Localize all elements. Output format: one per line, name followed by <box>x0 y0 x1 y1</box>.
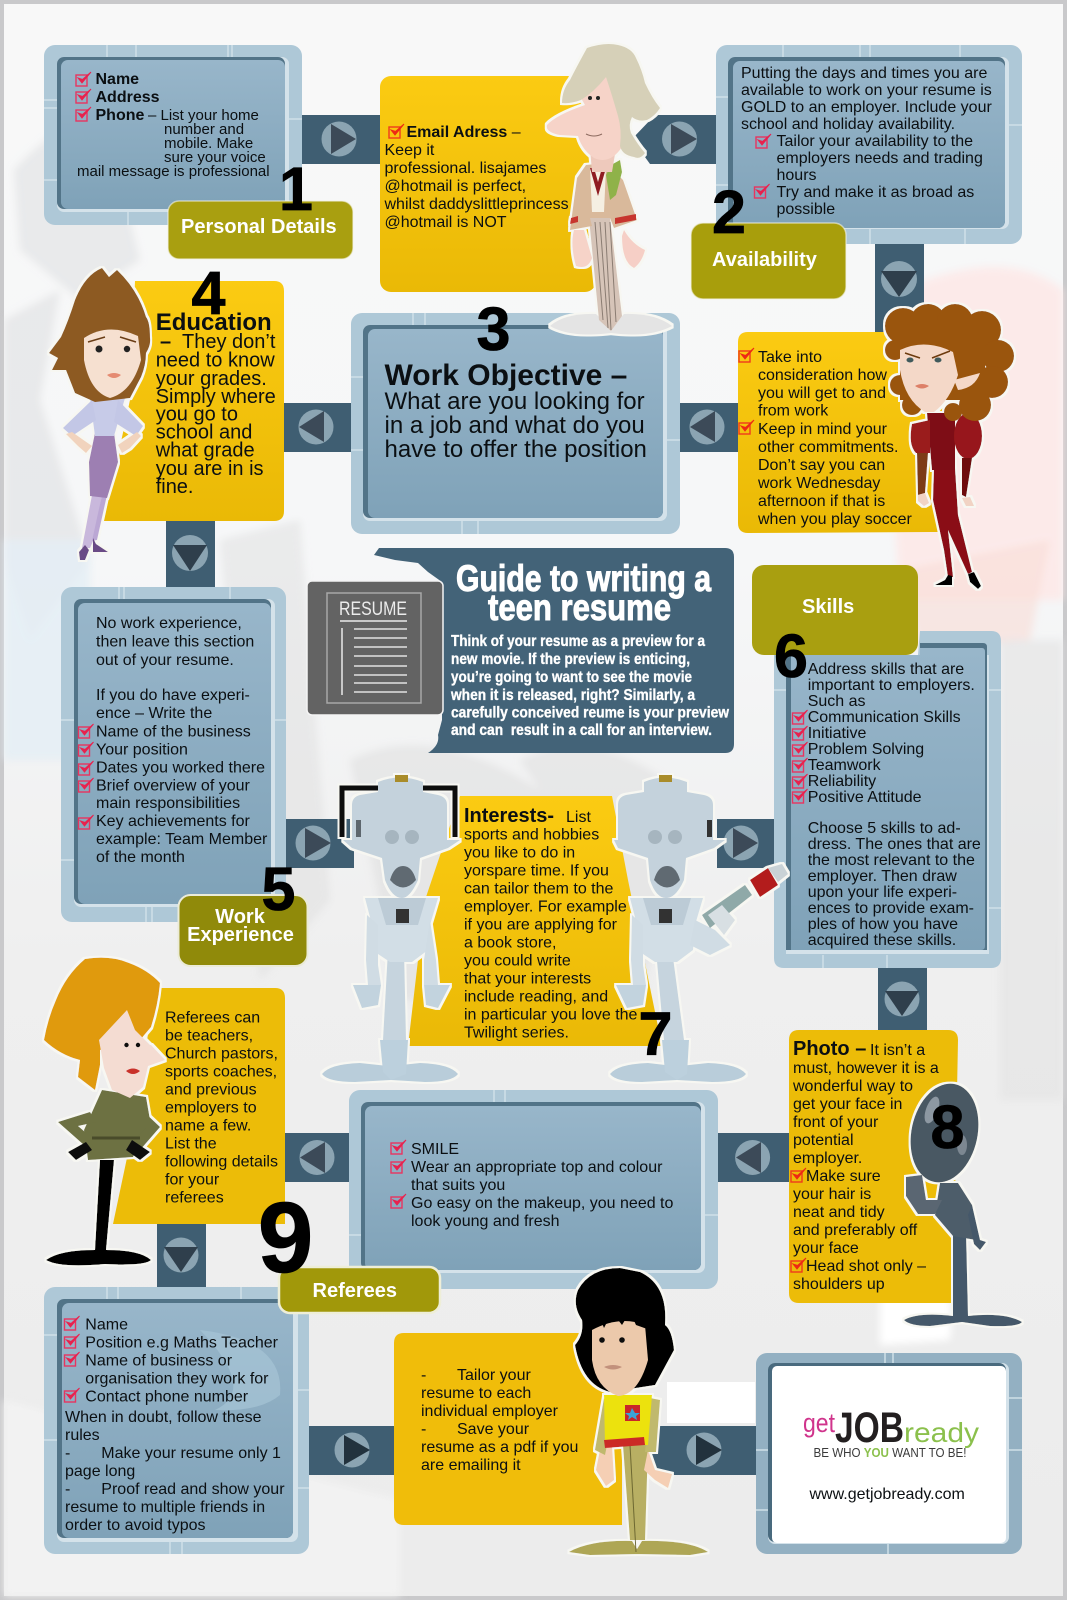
panel: referee details and rules <box>44 1287 309 1554</box>
text: availability <box>741 65 992 218</box>
text: photo: and preferably off <box>793 1222 918 1239</box>
text: interests: yorspare time. If you <box>464 862 609 880</box>
text: skills: Problem Solving <box>808 741 924 758</box>
panel: skills <box>774 631 1001 968</box>
icon: checkbox <box>64 1316 80 1330</box>
text: photo <box>792 1038 939 1293</box>
panel: availability <box>716 45 1022 244</box>
panel: interests <box>408 796 662 1046</box>
text: referee details: Make your resume only 1 <box>101 1445 281 1462</box>
text: photo: potential <box>793 1132 854 1149</box>
label: personal details: Personal Details <box>181 216 337 238</box>
icon: checkbox <box>792 774 808 788</box>
text: name address phone: Phone <box>96 107 144 124</box>
text: interests: Interests- <box>464 805 554 827</box>
text: photo: shoulders up <box>793 1276 885 1293</box>
text: interests: sports and hobbies <box>464 826 599 844</box>
intro text: carefully conceived reume is your preview <box>451 704 729 722</box>
text: work objective <box>384 359 647 463</box>
label: work experience: Experience <box>187 924 294 946</box>
text: referees intro: sports coaches, <box>165 1064 277 1080</box>
text: transport: you will get to and <box>758 385 886 402</box>
character: woman in purple skirt <box>49 268 150 560</box>
text: referee details: - <box>65 1445 70 1462</box>
text: final tips: resume to each <box>421 1385 531 1402</box>
text: referees intro <box>165 1010 278 1206</box>
connector: skills down <box>878 968 927 1031</box>
text: skills: ences to provide exam- <box>808 900 974 917</box>
text: referee details: resume to multiple friends in <box>65 1499 265 1516</box>
icon: checkbox <box>791 1168 806 1182</box>
heading: teen resume <box>488 587 671 628</box>
text: final tips: - <box>421 1421 426 1438</box>
number 2: 2 <box>712 178 746 246</box>
text: interests: List <box>566 809 591 826</box>
panel: logo card <box>756 1353 1022 1554</box>
text: availability: hours <box>776 167 817 184</box>
icon: checkbox <box>791 1258 806 1272</box>
text: smile: Go easy on the makeup, you need to <box>411 1195 674 1212</box>
text: final tips: Save your <box>457 1421 530 1438</box>
text: transport: from work <box>758 402 829 420</box>
text: skills: Teamwork <box>808 757 882 774</box>
text: name address phone <box>77 71 270 180</box>
text: transport: other commitments. <box>758 439 898 456</box>
text: name address phone: – List your home <box>148 107 259 124</box>
text: final tips: are emailing it <box>421 1457 521 1474</box>
text: availability: Putting the days and times you are <box>741 65 987 82</box>
text: skills: ples of how you have <box>808 916 958 933</box>
icon: checkbox <box>756 134 771 148</box>
text: email: professional. lisajames <box>384 160 546 177</box>
text: interests: that your interests <box>464 970 591 988</box>
text: skills: important to employers. <box>808 677 975 694</box>
connector: referees down <box>157 1224 206 1287</box>
character: cyberman left <box>322 775 460 1082</box>
panel: smile <box>349 1090 718 1289</box>
text: skills: Reliability <box>808 773 876 790</box>
text: referees intro: name a few. <box>165 1118 251 1134</box>
panel: education <box>104 281 284 521</box>
text: referee details: Position e.g Maths Teacher <box>85 1334 279 1352</box>
panel: referees intro <box>113 988 285 1224</box>
text: education: Simply where <box>156 386 276 408</box>
text: referee details: rules <box>65 1427 100 1444</box>
character: cyberman right with gun <box>610 775 788 1082</box>
icon: resume document <box>307 581 443 715</box>
text: transport: when you play soccer <box>757 511 913 528</box>
skills label text: Skills <box>802 596 854 618</box>
icon: checkbox <box>391 1159 406 1173</box>
logo <box>803 1404 979 1460</box>
panel: final tips <box>394 1333 622 1525</box>
website url: www.getjobready.com <box>808 1486 965 1503</box>
text: work experience: Key achievements for <box>96 813 251 830</box>
intro text <box>450 633 729 739</box>
text: availability: Try and make it as broad as <box>776 184 974 201</box>
label: skills <box>752 565 918 655</box>
panel: transport and commitments <box>738 332 950 533</box>
number 4: 4 <box>192 259 226 327</box>
text: referee details: Name of business or <box>85 1352 233 1370</box>
icon: checkbox <box>76 72 91 86</box>
text: work experience: Brief overview of your <box>96 778 251 794</box>
intro text: you’re going to want to see the movie <box>451 669 692 686</box>
text: interests: can tailor them to the <box>464 880 614 898</box>
text: interests: Twilight series. <box>464 1024 569 1042</box>
text: name address phone: mail message is professional <box>77 163 270 180</box>
text: photo: your face <box>793 1240 859 1257</box>
text: name address phone: Address <box>96 89 160 106</box>
text: final tips <box>421 1367 578 1474</box>
icon: checkbox <box>739 420 754 434</box>
connector: work experience to interests <box>286 819 354 868</box>
text: referees intro: Referees can <box>165 1010 260 1026</box>
text: referee details: order to avoid typos <box>65 1517 206 1534</box>
character: spoon-head figure <box>902 1077 1022 1326</box>
text: final tips: Tailor your <box>457 1367 531 1384</box>
icon: checkbox <box>754 184 770 198</box>
connector: availability down <box>875 244 924 334</box>
text: photo: get your face in <box>793 1096 902 1113</box>
text: work experience: No work experience, <box>96 615 242 632</box>
text: skills: employer. Then draw <box>808 868 957 885</box>
icon: checkbox <box>389 124 404 138</box>
icon: checkbox <box>78 724 94 738</box>
text: interests: if you are applying for <box>464 916 618 934</box>
text: referees intro: and previous <box>165 1082 257 1098</box>
connector: personal details to email <box>302 115 380 164</box>
text: skills: Communication Skills <box>808 709 961 726</box>
label: work experience <box>178 895 308 966</box>
number 1: 1 <box>279 155 313 223</box>
text: education: your grades. <box>156 368 267 390</box>
text: work experience: example: Team Member <box>96 831 268 848</box>
text: interests: a book store, <box>464 934 556 952</box>
icon: checkbox <box>792 742 808 756</box>
label: referees <box>279 1267 440 1313</box>
icon: checkbox <box>792 726 808 740</box>
text: email: @hotmail is NOT <box>384 214 507 231</box>
text: final tips: resume as a pdf if you <box>421 1439 578 1456</box>
text: email <box>384 124 569 231</box>
text: name address phone: mobile. Make <box>164 135 253 152</box>
text: smile <box>411 1141 674 1230</box>
text: education: school and <box>156 422 252 444</box>
icon: checkbox <box>391 1140 406 1154</box>
icon: checkbox <box>64 1388 80 1402</box>
text: referee details: page long <box>65 1463 135 1480</box>
text: referees intro: following details <box>165 1154 278 1170</box>
text: work experience: out of your resume. <box>96 652 234 669</box>
text: referees intro: referees <box>165 1190 224 1206</box>
text: transport: work Wednesday <box>757 475 880 492</box>
intro text: when it is released, right? Similarly, a <box>450 687 695 704</box>
text: referees intro: be teachers, <box>165 1028 253 1044</box>
panel: name address phone <box>44 45 302 225</box>
text: photo: Photo – <box>793 1038 866 1060</box>
text: photo: It isn’t a <box>870 1042 925 1059</box>
logo: ready <box>904 1417 979 1448</box>
logo: JOB <box>835 1404 904 1452</box>
text: photo: employer. <box>793 1150 862 1167</box>
label: personal details <box>168 201 353 259</box>
number 9: 9 <box>258 1182 313 1294</box>
intro text: and can result in a call for an interview. <box>451 722 712 739</box>
text: skills: the most relevant to the <box>808 852 975 869</box>
text: photo: your hair is <box>793 1186 871 1203</box>
text: photo: front of your <box>793 1114 879 1131</box>
label: referees: Referees <box>312 1280 397 1302</box>
text: availability: employers needs and trading <box>776 150 983 167</box>
text: work objective: in a job and what do you <box>384 412 645 439</box>
connector: photo to smile <box>718 1133 789 1182</box>
text: referees intro: for your <box>165 1172 220 1188</box>
label: availability <box>691 223 846 299</box>
icon: checkbox <box>792 710 808 724</box>
text: work objective: have to offer the position <box>384 436 647 463</box>
text: referee details: When in doubt, follow these <box>65 1409 262 1426</box>
text: education <box>155 309 276 498</box>
text: work objective: Work Objective – <box>384 359 627 392</box>
text: interests: you like to do in <box>464 844 575 862</box>
label: work experience: Work <box>215 906 266 928</box>
icon: checkbox <box>792 789 808 803</box>
label: availability: Availability <box>712 249 818 271</box>
text: work experience: ence – Write the <box>96 705 212 722</box>
text: photo: wonderful way to <box>792 1078 913 1095</box>
heading <box>456 558 711 628</box>
text: referee details: Name <box>85 1316 128 1334</box>
connector: tips to logo <box>640 1426 756 1475</box>
white patch above final connector <box>667 1382 755 1423</box>
text: photo: must, however it is a <box>793 1060 939 1077</box>
character: woman with orange hair <box>44 958 165 1265</box>
number 8: 8 <box>931 1093 964 1161</box>
text: photo: neat and tidy <box>793 1204 885 1221</box>
text: smile: look young and fresh <box>411 1213 560 1230</box>
text: smile: Wear an appropriate top and colour <box>411 1159 663 1176</box>
text: education: – <box>160 331 171 353</box>
text: education: need to know <box>156 350 275 372</box>
number 3: 3 <box>477 295 510 363</box>
text: work objective: What are you looking for <box>384 388 645 415</box>
text: availability: school and holiday availability. <box>741 116 955 133</box>
text: smile: that suits you <box>411 1177 505 1194</box>
text: name address phone: number and <box>164 121 244 138</box>
panel: work experience <box>61 587 286 922</box>
icon: checkbox <box>64 1352 80 1366</box>
connector: education down <box>166 521 215 587</box>
text: email: @hotmail is perfect, <box>384 178 526 195</box>
text: skills: Address skills that are <box>808 661 964 678</box>
text: work experience: If you do have experi- <box>96 687 250 704</box>
text: skills: Initiative <box>808 725 866 742</box>
title banner <box>374 548 734 753</box>
connector: interests to skills <box>717 819 775 868</box>
text: photo: Make sure <box>806 1168 881 1185</box>
text: skills: Choose 5 skills to ad- <box>808 820 961 837</box>
panel: photo <box>789 1030 958 1303</box>
text: education: you go to <box>156 404 238 426</box>
text: skills: Positive Attitude <box>808 789 922 806</box>
intro text: new movie. If the preview is enticing, <box>451 651 690 668</box>
panel: email address <box>380 76 596 292</box>
connector: email to availability <box>632 115 716 164</box>
connector: smile to referees <box>285 1133 349 1182</box>
text: transport: Don’t say you can <box>758 457 885 474</box>
connector: objective to education <box>284 403 351 452</box>
text: referee details: organisation they work for <box>85 1370 269 1388</box>
text: transport: Take into <box>758 349 822 366</box>
icon: checkbox <box>78 761 94 775</box>
connector: transport to objective <box>680 403 740 452</box>
text: interests: include reading, and <box>464 988 608 1006</box>
text: transport: afternoon if that is <box>758 493 885 510</box>
text: interests: employer. For example <box>464 898 627 916</box>
connector: rules to tips <box>309 1426 395 1475</box>
text: referee details <box>65 1316 285 1534</box>
icon: checkbox <box>78 742 94 756</box>
icon: checkbox <box>78 815 94 829</box>
icon: checkbox <box>78 778 94 792</box>
character: doctor in beige coat <box>547 44 672 334</box>
text: availability: possible <box>776 201 835 218</box>
text: email: Keep it <box>384 142 435 159</box>
logo: BE WHO YOU WANT TO BE! <box>814 1446 966 1460</box>
heading: Guide to writing a <box>456 558 711 599</box>
text: transport: consideration how <box>758 367 887 384</box>
text: transport: Keep in mind your <box>758 421 888 438</box>
number 7: 7 <box>639 1000 672 1068</box>
text: work experience: then leave this section <box>96 634 254 650</box>
text: skills: acquired these skills. <box>808 932 956 949</box>
text: final tips: individual employer <box>421 1403 559 1420</box>
text: education: They don’t <box>182 331 276 353</box>
text: skills: dress. The ones that are <box>808 836 981 853</box>
text: final tips: - <box>421 1367 426 1384</box>
text: interests: in particular you love the <box>464 1006 638 1024</box>
text: work experience: of the month <box>96 849 185 866</box>
text: referee details: Proof read and show your <box>101 1481 285 1498</box>
icon: checkbox <box>391 1194 406 1208</box>
text: interests <box>464 805 638 1042</box>
text: email: Email Adress – <box>406 124 521 141</box>
icon: checkbox <box>739 348 754 362</box>
text: name address phone: Name <box>96 71 139 88</box>
text: skills <box>808 661 981 949</box>
text: referee details: - <box>65 1481 70 1498</box>
icon: resume document: RESUME <box>339 599 407 620</box>
text: education: you are in is <box>156 458 264 480</box>
icon: checkbox <box>792 758 808 772</box>
text: name address phone: sure your voice <box>164 149 266 166</box>
text: skills: Such as <box>808 693 866 710</box>
intro text: Think of your resume as a preview for a <box>451 633 705 650</box>
text: availability: available to work on your resume is <box>741 82 992 99</box>
text: education: what grade <box>155 440 255 462</box>
text: referee details: Contact phone number <box>85 1388 249 1406</box>
number 6: 6 <box>774 622 808 690</box>
text: work experience: Your position <box>96 742 188 758</box>
icon: checkbox <box>64 1334 80 1348</box>
text: education: fine. <box>156 476 194 498</box>
text: smile: SMILE <box>411 1141 459 1158</box>
panel: work objective <box>351 313 680 534</box>
icon: checkbox <box>76 107 91 121</box>
text: referees intro: List the <box>165 1136 217 1152</box>
number 5: 5 <box>262 855 295 923</box>
text: skills: upon your life experi- <box>808 884 957 901</box>
text: email: whilst daddyslittleprincess <box>384 196 569 213</box>
text: work experience: Name of the business <box>96 724 251 740</box>
text: availability: GOLD to an employer. Include your <box>741 99 992 116</box>
text: work experience: Dates you worked there <box>96 760 265 776</box>
text: education: Education <box>156 309 272 336</box>
text: transport <box>757 349 913 528</box>
text: work experience: main responsibilities <box>96 795 240 812</box>
text: availability: Tailor your availability to the <box>776 133 973 150</box>
character: boy with black hair <box>569 1268 708 1555</box>
character: woman in red suit <box>885 304 1014 589</box>
logo: get <box>803 1408 835 1438</box>
text: referees intro: employers to <box>165 1100 257 1116</box>
icon: checkbox <box>76 89 91 103</box>
text: referees intro: Church pastors, <box>165 1046 278 1062</box>
text: work experience <box>96 615 268 866</box>
text: photo: Head shot only – <box>806 1258 926 1275</box>
text: interests: you could write <box>464 952 571 970</box>
